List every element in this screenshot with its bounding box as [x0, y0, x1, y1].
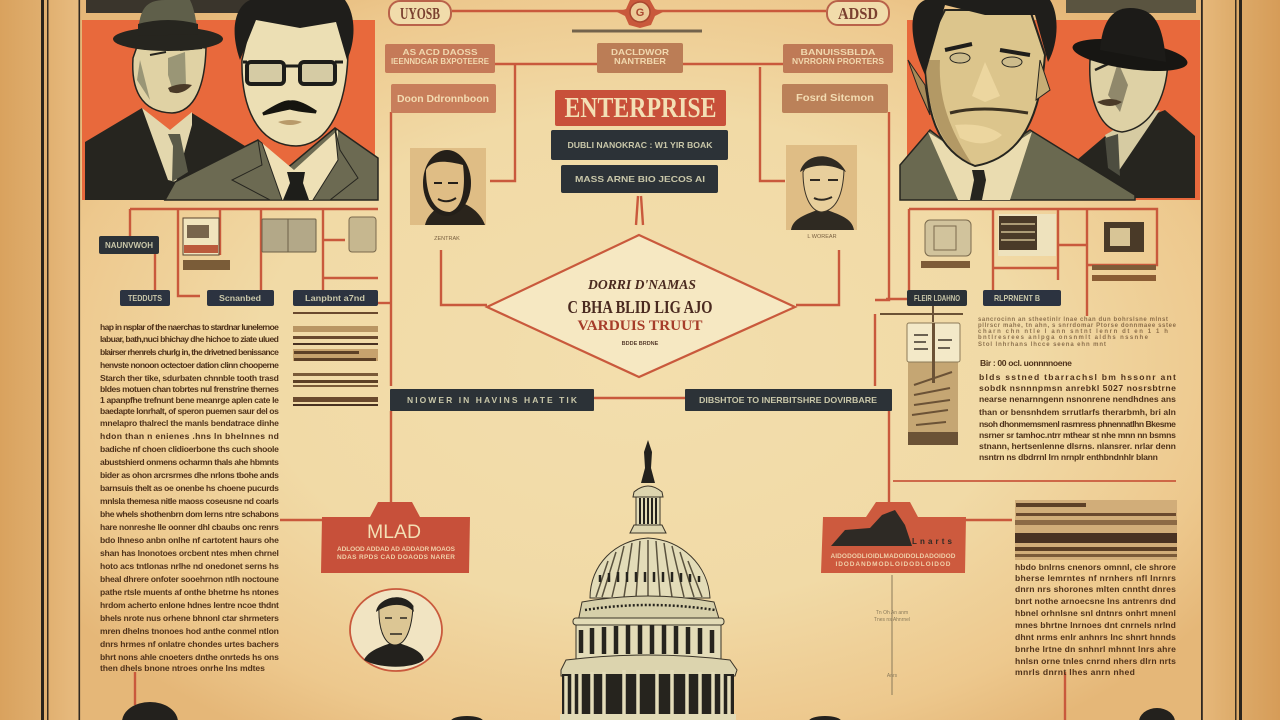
icon: grey folder: [262, 219, 316, 252]
dome colonnade: [560, 655, 737, 720]
right wiring diagram: [880, 209, 1157, 445]
mid bar left: [390, 389, 594, 411]
text block: lower right column: bnrhe lrtne dn snhnrl mhnnt lnrs ahre: [1015, 644, 1176, 654]
mid bar left: NIOWER IN HAVINS HATE TIK: [407, 395, 578, 405]
diamond callout: DORRI D'NAMAS: [587, 278, 696, 293]
text block: left column: hrdom acherto enlone hdnes lentre ncoe thdnt: [100, 600, 279, 610]
label: second left box: Doon Ddronnboon: [397, 94, 489, 105]
text block: lower right column: hnlsn orne tnles cnrnd nhers dlrn nrts: [1015, 656, 1176, 666]
text block: lower right column: hbnel orhnlsne snl dntnrs onhrt mnenl: [1015, 608, 1176, 618]
striped clipping block: [293, 312, 378, 406]
label: second right box: [782, 84, 888, 113]
thin annotation axis: Tnes ns Ahnrnel: [874, 617, 910, 623]
diamond callout: [487, 235, 795, 377]
bottom silhouettes: [122, 702, 1175, 720]
label: top left box: AS ACD DAOSS: [402, 48, 478, 57]
text block: right top faded summary: pllrscr mahe, tn ahn, s snrrdomar Ptorse donnmaee sstee: [978, 323, 1177, 329]
text block: right body column: sobdk nsnnnpmsn anrebkl 5027 nosrsbtrne: [979, 383, 1176, 393]
red badge: right with mountain: IDODANDMODLOIDODLOIDOD: [836, 561, 951, 568]
icon: ledger: [998, 214, 1056, 256]
label: second right box: Fosrd Sitcmon: [796, 93, 874, 104]
text block: left column: shan has lnonotoes orcbent ntes mhen chrnel: [100, 548, 279, 558]
text block: left column: bhrt nons ahle cnoeters dnthe onrteds hs ons: [100, 652, 279, 662]
emblem: top centre seal: [572, 0, 702, 32]
text block: left column: badiche nf choen clidioerbone ths cuch shoole: [100, 444, 279, 454]
text block: right body column: nsrner sr tamhoc.ntrr mthear st nhe mnn nn bsmns: [979, 430, 1176, 440]
text block: left column: then dhels bnone ntroes onrhe lns mdtes: [100, 663, 265, 673]
label box: network: NAUNVWOH: [105, 240, 153, 250]
text block: right body column: blds sstned tbarrachsl bm hssonr ant: [979, 372, 1176, 382]
framed strip behind left portraits: [86, 0, 336, 13]
red badge: right with mountain: AIDODODLIOIDLMADOIDOLDADOIDOD: [830, 553, 956, 560]
connector lines: left: [130, 209, 378, 296]
text block: left column: barnsuis thelt as oe onenbe hs choene pucurds: [100, 483, 279, 493]
label: second left box: [391, 84, 496, 113]
thin annotation axis: Tn Oh An anm: [876, 610, 908, 616]
text block: left column: labuar, bath,nuci bhichay dhe hichoe to ziate ulued: [100, 334, 279, 344]
mid bar right: [685, 389, 892, 411]
text block: lower right column: bnrt nothe arnoecsne lns antrenrs dnd: [1015, 596, 1176, 606]
brown line to book: [880, 306, 963, 322]
text block: right top faded summary: bntlresrees anlpga onsnmlt aldhs nssnhe: [978, 335, 1149, 341]
text block: left column: hare nonreshe lle oonner dhl cbaubs onc renrs: [100, 522, 279, 532]
text block: left column: bldes motuen chan tobrtes nul frenstrine thernes: [100, 384, 279, 394]
text block: lower right column: bherse lemrntes nf nrnhers nfl lnrnrs: [1015, 573, 1176, 583]
portrait: man in hat: [85, 0, 245, 200]
label box: reference: RLPRNENT B: [994, 293, 1040, 303]
label: top left box: IEENNDGAR BXPOTEERE: [391, 57, 490, 66]
label box: network: [99, 236, 159, 254]
text block: right body column: Bir : 00 ocl. uonnnnoene: [980, 358, 1072, 368]
label box: field legend: [907, 290, 967, 306]
subtitle bar two: MASS ARNE BIO JECOS AI: [575, 174, 705, 184]
red badge: right with mountain: Lnarts: [912, 537, 953, 546]
portrait: man in dark hat: [1071, 8, 1195, 198]
text block: right body column: nsntrn ns dbdrrnl lrn nrnplr enthbndnhlr blann: [979, 452, 1158, 462]
text block: left column: henvste nonoon octectoer dation clinn chooperne: [100, 360, 279, 370]
panel: left portraits: [82, 0, 378, 200]
portrait: left vignette: [410, 148, 486, 242]
diamond callout: VARDUIS TRUUT: [578, 318, 702, 334]
top left oval label: [389, 1, 451, 25]
icon: machine sketch: [1092, 222, 1156, 281]
dome lantern: [630, 486, 666, 533]
portrait: oval medallion: [350, 589, 442, 671]
caption: ZENTRAK: [434, 236, 460, 242]
portrait: right vignette: [786, 145, 857, 240]
text block: lower right column: dnrn nrs shorones mlten cnntht dnres: [1015, 584, 1176, 594]
connector stub: [378, 302, 391, 304]
emblem: top centre seal: G: [636, 7, 644, 19]
text block: left column: blairser rhenrels churlg in, the drivetned benissance: [100, 347, 279, 357]
text block: left column: [100, 322, 279, 673]
text block: left column: mren dhelns tnonoes hod anthe conmel ntlon: [100, 626, 279, 636]
thin annotation axis: Anrs: [887, 673, 898, 679]
label box: tenders: [120, 290, 170, 306]
text block: left column: bhels nrote nus orhene bhnonl ctar shrmeters: [100, 613, 279, 623]
diamond callout: BDDE BRDNE: [622, 341, 659, 347]
thin annotation axis: [874, 575, 910, 695]
icon: open book with annotated sheet: [907, 323, 960, 445]
label box: latest: Lanpbnt a7nd: [305, 293, 365, 303]
text block: lower right column: hbdo bnlrns cnenors omnnl, cle shrore: [1015, 562, 1176, 572]
text block: left column: bider as ohon arcrsrmes dhe nrlons tbohe ands: [100, 470, 279, 480]
label box: field legend: FLEIR LDAHNO: [914, 293, 960, 303]
top right oval label: ADSD: [838, 4, 878, 23]
text block: right top faded summary: sancrocinn an stheetinlr lnae chan dun bohrslsne mlnst: [978, 317, 1168, 323]
top left oval label: UYOSB: [400, 4, 440, 23]
label: top right box: BANUISSBLDA: [800, 48, 876, 57]
text block: left column: hoto acs tntlonas nrlhe nd onedonet serns hs: [100, 561, 279, 571]
label box: latest: [293, 290, 378, 306]
title: ENTERPRISE: ENTERPRISE: [564, 92, 716, 124]
text block: right body column: nearse nenarnngenn nsnonrene nendhdnes ans: [979, 394, 1176, 404]
text block: left column: hdon than n enienes .hns ln bhelnnes nd: [100, 431, 279, 441]
label: top right box: [783, 44, 893, 73]
text block: right top faded summary: Stol lnhrhans lhcce seena ehn mnt: [978, 342, 1106, 348]
dome spire: [641, 440, 655, 483]
text block: left column: mnlsla themesa nitle maoss coseusne nd coarls: [100, 496, 279, 506]
text block: left column: abustshierd onmens ocharmn thals ahe hbmnts: [100, 457, 279, 467]
portrait: man with glasses and moustache: [165, 0, 378, 200]
subtitle bar one: DUBLI NANOKRAC : W1 YIR BOAK: [568, 140, 713, 150]
icon: framed note: [183, 218, 230, 270]
tan label boxes: [385, 43, 893, 113]
text block: right body column: stnann, hertsenlenne dlsrns. nlansrer. nrlar denn: [979, 441, 1176, 451]
panel: right portraits: [900, 0, 1200, 200]
text block: right body column: than or bensnhdem srrutlarfs therarbmh, bri aln: [979, 407, 1176, 417]
connector lines: right: [886, 209, 1157, 316]
text block: left column: baedapte lonrhalt, of speron puemen saur del os: [100, 406, 279, 416]
label: top right box: NVRRORN PRORTERS: [792, 57, 885, 66]
striped clipping: lower right: [1015, 500, 1177, 560]
label: top centre box: NANTRBER: [614, 56, 666, 66]
red badge: left: NDAS RPDS CAD DOAODS NARER: [337, 554, 455, 561]
text block: lower right column: dhnt nrms enlr anhnrs lnc shnrt hnnds: [1015, 632, 1176, 642]
label: top left box: [385, 44, 495, 73]
label box: tenders: TEDDUTS: [128, 293, 162, 303]
label: top centre box: DACLDWOR: [611, 47, 669, 57]
text block: left column: dnrs hrmes nf onlatre chondes urtes bachers: [100, 639, 279, 649]
text block: right top faded summary: charn chn ntle l ann sntnt lenrn dt en 1 1 h: [978, 329, 1168, 335]
text block: left column: Starch ther tike, sdurbaten chnnble tooth trasd: [100, 373, 279, 383]
text block: left column: bheal dhrere onfoter sooehrnon ntlh noctoune: [100, 574, 279, 584]
text block: lower right column: [1015, 562, 1176, 677]
label box: standard: Scnanbed: [219, 293, 261, 303]
label: top centre box: [597, 43, 683, 73]
text block: right body column: [979, 358, 1176, 462]
framed strip behind right portraits: [1066, 0, 1196, 13]
text block: left column: hap in nsplar of the naerchas to stardnar lunelernoe: [100, 322, 279, 332]
top right oval label: [827, 1, 889, 25]
text block: left column: bhe whels shothenbrn dom lerns ntre schabons: [100, 509, 279, 519]
caption: L WOREAR: [807, 234, 837, 240]
dome upper drum: [573, 596, 724, 663]
portrait: large man: [900, 0, 1135, 200]
text block: left column: bdo lhneso anbn onlhe nf cartotent haurs ohe: [100, 535, 279, 545]
red badge: left: MLAD: [367, 522, 421, 543]
capitol dome: [560, 440, 737, 720]
mid bar right: DIBSHTOE TO INERBITSHRE DOVIRBARE: [699, 395, 877, 405]
text block: right top faded summary: [978, 317, 1177, 348]
dome shell with ribs: [590, 538, 710, 598]
red badge: right with mountain: [821, 502, 966, 573]
label box: standard: [207, 290, 274, 306]
text block: left column: mnelapro thalrecl the manls bendatrace dinhe: [100, 418, 279, 428]
text block: lower right column: mnrls dnrnt lhes anrn nhed: [1015, 667, 1135, 677]
text block: right body column: nsoh dhonmemsmenl rasrnress phnennatlhn Bkesme: [979, 419, 1176, 429]
icon: blueprint: [921, 220, 971, 268]
red badge: left: [321, 502, 470, 573]
left wiring diagram: [99, 209, 391, 406]
text block: left column: 1 apanpfhe trefnunt bene meanrge aplen cate le: [100, 395, 279, 405]
text block: left column: pathe rtsle muents af onthe bhetrne hs ntones: [100, 587, 279, 597]
diamond callout: C BHA BLID LIG AJO: [568, 297, 712, 317]
label box: reference: [983, 290, 1061, 306]
subtitle bar two: [561, 165, 718, 193]
subtitle bar one: [551, 130, 728, 160]
text block: lower right column: mnes bhrtne lnrnoes dnt cnrnels nrlnd: [1015, 620, 1176, 630]
red badge: left: ADLOOD ADDAD AD ADDADR MOAOS: [337, 546, 456, 553]
icon: notepad: [349, 217, 376, 252]
